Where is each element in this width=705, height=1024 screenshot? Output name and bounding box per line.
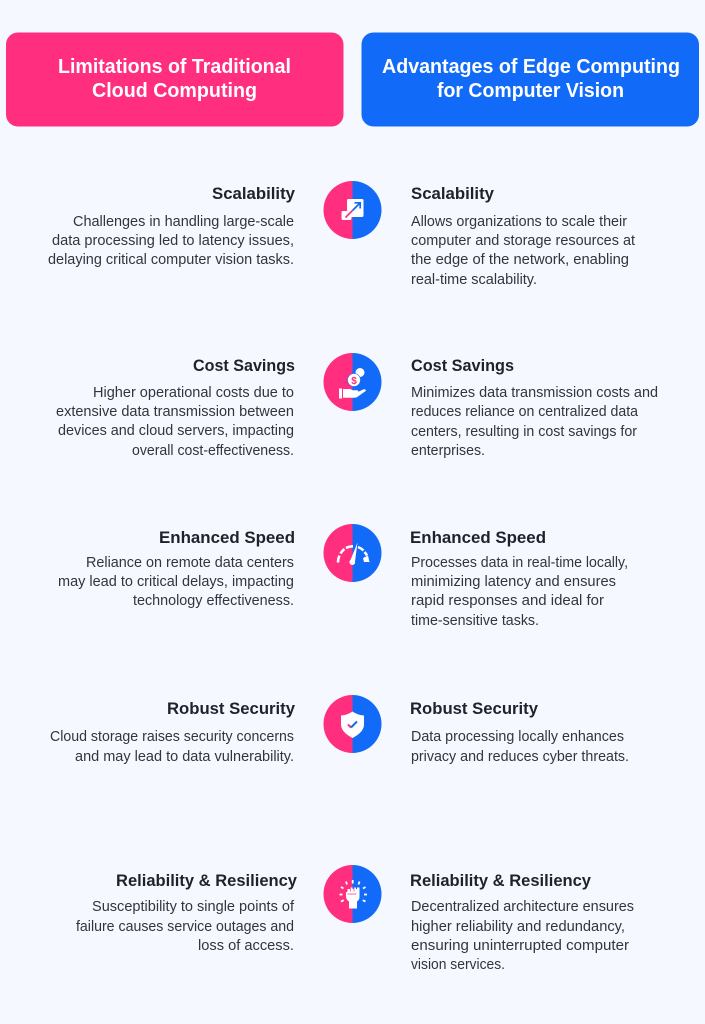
advantage: enhanced speed: Processes data in real-time locally, <box>411 555 628 571</box>
icon: hand holding money <box>324 353 382 411</box>
header: advantages of edge computing: for Computer Vision <box>437 79 624 102</box>
advantage: cost savings <box>411 357 658 459</box>
advantage: cost savings: reduces reliance on centralized data <box>411 404 639 420</box>
header: advantages of edge computing: Advantages of Edge Computing <box>382 55 680 78</box>
icon: scalability arrow <box>324 181 382 239</box>
limitation: cost savings: Cost Savings <box>193 357 295 375</box>
advantage: reliability and resiliency: vision services. <box>411 957 505 973</box>
limitation: scalability <box>48 185 296 268</box>
advantage: enhanced speed <box>410 529 628 629</box>
limitation: scalability: Challenges in handling large-scale <box>73 214 294 230</box>
header: limitations of traditional cloud computing <box>6 32 344 126</box>
icon: security shield <box>324 695 382 753</box>
advantage: reliability and resiliency: Reliability & Resiliency <box>410 872 592 890</box>
limitation: scalability: data processing led to latency issues, <box>52 233 294 249</box>
limitation: scalability: Scalability <box>212 185 296 203</box>
limitation: reliability and resiliency: Susceptibility to single points of <box>92 899 295 915</box>
header: limitations of traditional cloud computing: Limitations of Traditional <box>58 55 291 78</box>
icon: speedometer <box>324 524 382 582</box>
limitation: reliability and resiliency: Reliability & Resiliency <box>116 872 298 890</box>
advantage: reliability and resiliency: higher reliability and redundancy, <box>411 919 625 935</box>
advantage: enhanced speed: rapid responses and ideal for <box>411 593 604 609</box>
advantage: scalability: Scalability <box>411 185 495 203</box>
advantage: scalability: real-time scalability. <box>411 272 537 288</box>
limitation: robust security: Robust Security <box>167 700 296 718</box>
limitation: robust security: Cloud storage raises security concerns <box>50 729 294 745</box>
advantage: cost savings: centers, resulting in cost savings for <box>411 424 637 440</box>
icon: hand holding money: $ <box>351 376 357 387</box>
advantage: robust security: Robust Security <box>410 700 539 718</box>
advantage: reliability and resiliency <box>410 872 634 973</box>
advantage: scalability <box>411 185 635 288</box>
icon: raised fist <box>324 865 382 923</box>
advantage: robust security: privacy and reduces cyber threats. <box>411 749 629 765</box>
limitation: reliability and resiliency: loss of access. <box>198 938 294 954</box>
advantage: robust security <box>410 700 629 765</box>
advantage: reliability and resiliency: Decentralized architecture ensures <box>411 899 634 915</box>
limitation: cost savings: Higher operational costs due to <box>93 385 294 401</box>
limitation: enhanced speed: technology effectiveness. <box>133 593 294 609</box>
header: limitations of traditional cloud computing: Cloud Computing <box>92 79 257 102</box>
limitation: cost savings: overall cost-effectiveness. <box>132 443 294 459</box>
advantage: scalability: the edge of the network, enabling <box>411 252 629 268</box>
advantage: reliability and resiliency: ensuring uninterrupted computer <box>411 938 629 954</box>
limitation: robust security: and may lead to data vulnerability. <box>75 749 294 765</box>
limitation: cost savings <box>56 357 295 459</box>
advantage: enhanced speed: minimizing latency and ensures <box>411 574 616 590</box>
advantage: cost savings: Minimizes data transmission costs and <box>411 385 658 401</box>
advantage: robust security: Data processing locally enhances <box>411 729 624 745</box>
limitation: cost savings: devices and cloud servers, impacting <box>58 423 294 439</box>
limitation: reliability and resiliency <box>76 872 298 954</box>
limitation: enhanced speed <box>58 529 295 609</box>
advantage: cost savings: Cost Savings <box>411 357 514 375</box>
limitation: cost savings: extensive data transmission between <box>56 404 294 420</box>
advantage: cost savings: enterprises. <box>411 443 485 459</box>
limitation: enhanced speed: may lead to critical delays, impacting <box>58 574 294 590</box>
advantage: enhanced speed: Enhanced Speed <box>410 529 546 547</box>
limitation: enhanced speed: Enhanced Speed <box>159 529 295 547</box>
advantage: scalability: computer and storage resources at <box>411 233 635 249</box>
advantage: enhanced speed: time-sensitive tasks. <box>411 613 539 629</box>
advantage: scalability: Allows organizations to scale their <box>411 214 627 230</box>
limitation: robust security <box>50 700 296 765</box>
limitation: scalability: delaying critical computer vision tasks. <box>48 252 294 268</box>
limitation: enhanced speed: Reliance on remote data centers <box>86 555 294 571</box>
header: advantages of edge computing <box>362 32 699 126</box>
limitation: reliability and resiliency: failure causes service outages and <box>76 919 294 935</box>
